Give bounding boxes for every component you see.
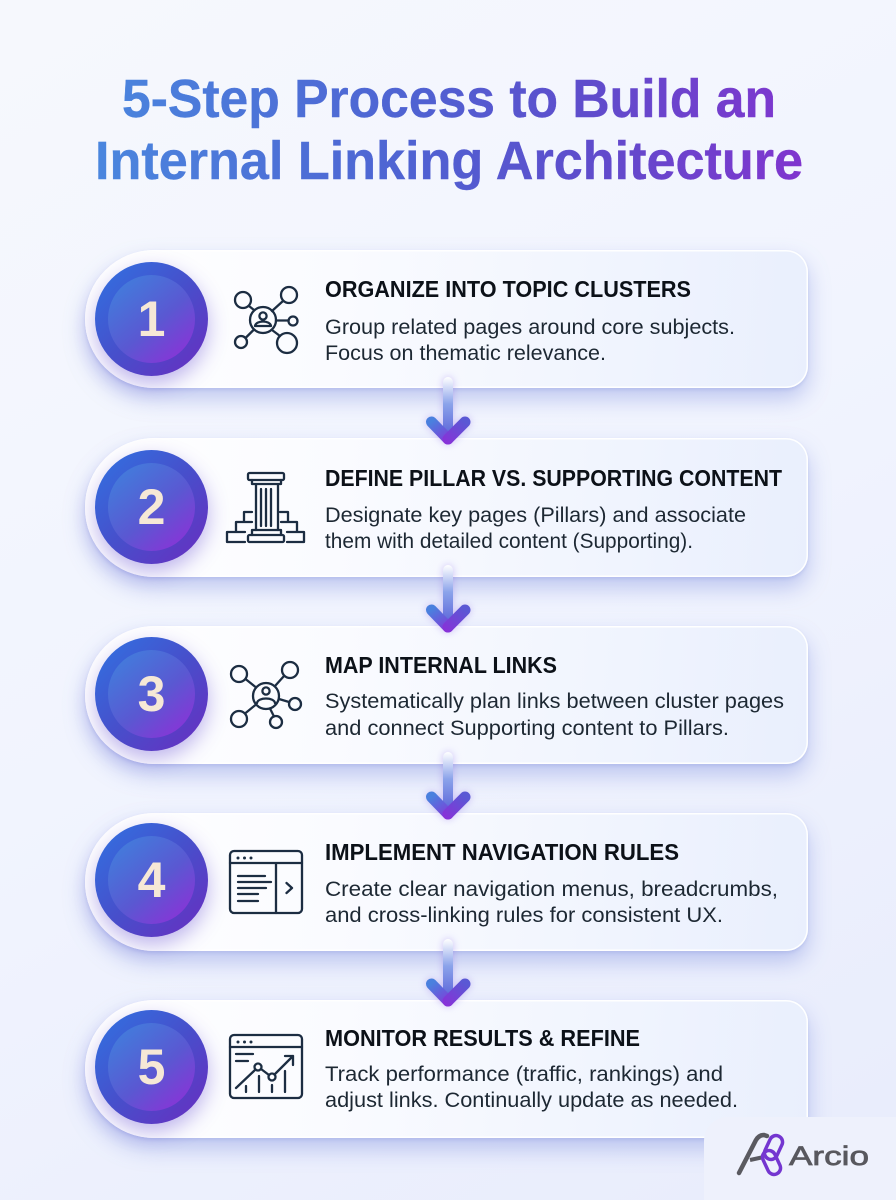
step 2 number badge: 2 xyxy=(138,479,165,535)
step 3 number badge: 3 xyxy=(138,666,165,722)
icon: internal link map xyxy=(231,662,301,728)
step 5 heading: MONITOR RESULTS & REFINE xyxy=(325,1025,640,1051)
step 2 description: them with detailed content (Supporting). xyxy=(325,530,693,553)
panel: step 4 xyxy=(85,813,808,951)
step 5 number badge xyxy=(95,1010,208,1124)
step 3 description xyxy=(325,690,784,740)
arrow: step 1 to step 2 xyxy=(423,374,474,448)
panel: step 3 xyxy=(85,626,808,764)
arrow: step 2 to step 3 xyxy=(423,562,474,636)
step 3 number badge xyxy=(95,637,208,751)
arrow: step 4 to step 5 xyxy=(423,936,474,1010)
panel: step 5 xyxy=(85,1000,808,1138)
icon: pillar with steps xyxy=(227,473,304,542)
step 4 number badge xyxy=(95,823,208,937)
step 3 description: and connect Supporting content to Pillars. xyxy=(325,717,729,740)
step 2 heading: DEFINE PILLAR VS. SUPPORTING CONTENT xyxy=(325,465,782,491)
step 3 description: Systematically plan links between cluster pages xyxy=(325,690,784,713)
logo panel: Arcio xyxy=(704,1117,896,1200)
step 1 number badge xyxy=(95,262,208,376)
step 4 description: and cross-linking rules for consistent UX. xyxy=(325,904,723,927)
title: 5-Step Process to Build an xyxy=(122,69,776,129)
step 5 number badge: 5 xyxy=(138,1039,165,1095)
step 2 description xyxy=(325,504,746,553)
step 5 description: Track performance (traffic, rankings) and xyxy=(325,1063,723,1086)
step 1 heading: ORGANIZE INTO TOPIC CLUSTERS xyxy=(325,276,691,302)
step 1 description xyxy=(325,316,735,365)
step 1 number badge: 1 xyxy=(138,291,165,347)
panel: step 2 xyxy=(85,438,808,577)
panel: step 1 xyxy=(85,250,808,388)
icon: navigation window xyxy=(230,851,302,913)
step 4 number badge: 4 xyxy=(138,852,165,908)
step 1 description: Focus on thematic relevance. xyxy=(325,342,606,365)
icon: analytics window xyxy=(230,1035,302,1098)
step 5 description xyxy=(325,1063,738,1112)
arrow: step 3 to step 4 xyxy=(423,749,474,822)
step 1 description: Group related pages around core subjects. xyxy=(325,316,735,339)
title: Internal Linking Architecture xyxy=(95,131,803,191)
step 4 heading: IMPLEMENT NAVIGATION RULES xyxy=(325,839,679,865)
step 2 number badge xyxy=(95,450,208,564)
step 5 description: adjust links. Continually update as needed. xyxy=(325,1089,738,1112)
logo wordmark: Arcio xyxy=(789,1141,869,1171)
step 4 description xyxy=(325,878,778,927)
step 2 description: Designate key pages (Pillars) and associate xyxy=(325,504,746,527)
step 4 description: Create clear navigation menus, breadcrumbs, xyxy=(325,878,778,901)
step 3 heading: MAP INTERNAL LINKS xyxy=(325,652,557,678)
title xyxy=(95,69,803,191)
icon: topic cluster network xyxy=(235,287,298,353)
logo mark xyxy=(739,1133,785,1177)
